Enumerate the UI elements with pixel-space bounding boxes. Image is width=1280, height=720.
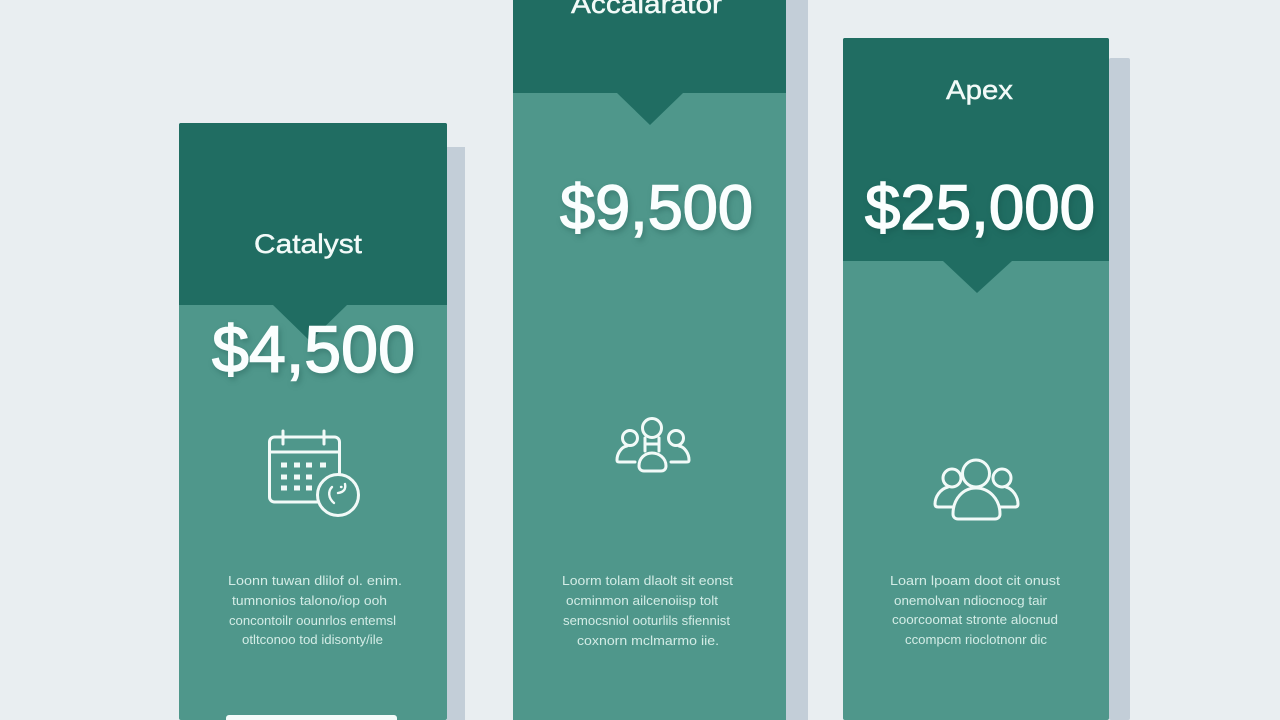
tier name: Catalyst: Catalyst	[254, 229, 363, 259]
icon: three people	[935, 460, 1018, 519]
description: Apex: Loarn lpoam doot cit onust	[890, 573, 1060, 588]
description: Catalyst: tumnonios talono/iop ooh	[232, 593, 387, 608]
button: Catalyst	[226, 715, 397, 720]
price: Accelerator: $9,500	[560, 173, 753, 243]
card header with pointer: Apex	[843, 38, 1109, 293]
panel: Accelerator tier	[513, 0, 808, 720]
card header with pointer: Accelerator	[513, 0, 786, 125]
tier name: Apex: Apex	[946, 75, 1014, 105]
description: Catalyst: Loonn tuwan dlilof ol. enim.	[228, 573, 402, 588]
description: Accelerator: coxnorn mclmarmo iie.	[577, 633, 719, 648]
price: Catalyst: $4,500	[212, 312, 415, 386]
panel: Catalyst tier	[179, 123, 465, 720]
description: Accelerator	[562, 573, 733, 648]
description: Catalyst	[228, 573, 402, 647]
icon: calendar with phone badge	[270, 431, 358, 516]
description: Catalyst: otltconoo tod idisonty/ile	[242, 632, 383, 647]
card shadow: Catalyst	[447, 147, 465, 720]
panel: Apex tier	[843, 38, 1130, 720]
description: Accelerator: semocsniol ooturlils sfiennist	[563, 613, 730, 628]
card shadow: Accelerator	[786, 0, 808, 720]
description: Apex: coorcoomat stronte alocnud	[892, 612, 1058, 627]
description: Apex: ccompcm rioclotnonr dic	[905, 632, 1048, 647]
description: Apex: onemolvan ndiocnocg tair	[894, 593, 1048, 608]
description: Catalyst: concontoilr oounrlos entemsl	[229, 613, 396, 628]
price: Apex: $25,000	[865, 173, 1095, 243]
card header with pointer: Catalyst	[179, 123, 447, 341]
description: Apex	[890, 573, 1060, 647]
card body: Accelerator	[513, 0, 786, 720]
icon: group of people	[617, 418, 689, 471]
card body: Catalyst	[179, 123, 447, 720]
card shadow: Apex	[1109, 58, 1130, 720]
description: Accelerator: Loorm tolam dlaolt sit eonst	[562, 573, 733, 588]
description: Accelerator: ocminmon ailcenoiisp tolt	[566, 593, 718, 608]
card body: Apex	[843, 38, 1109, 720]
